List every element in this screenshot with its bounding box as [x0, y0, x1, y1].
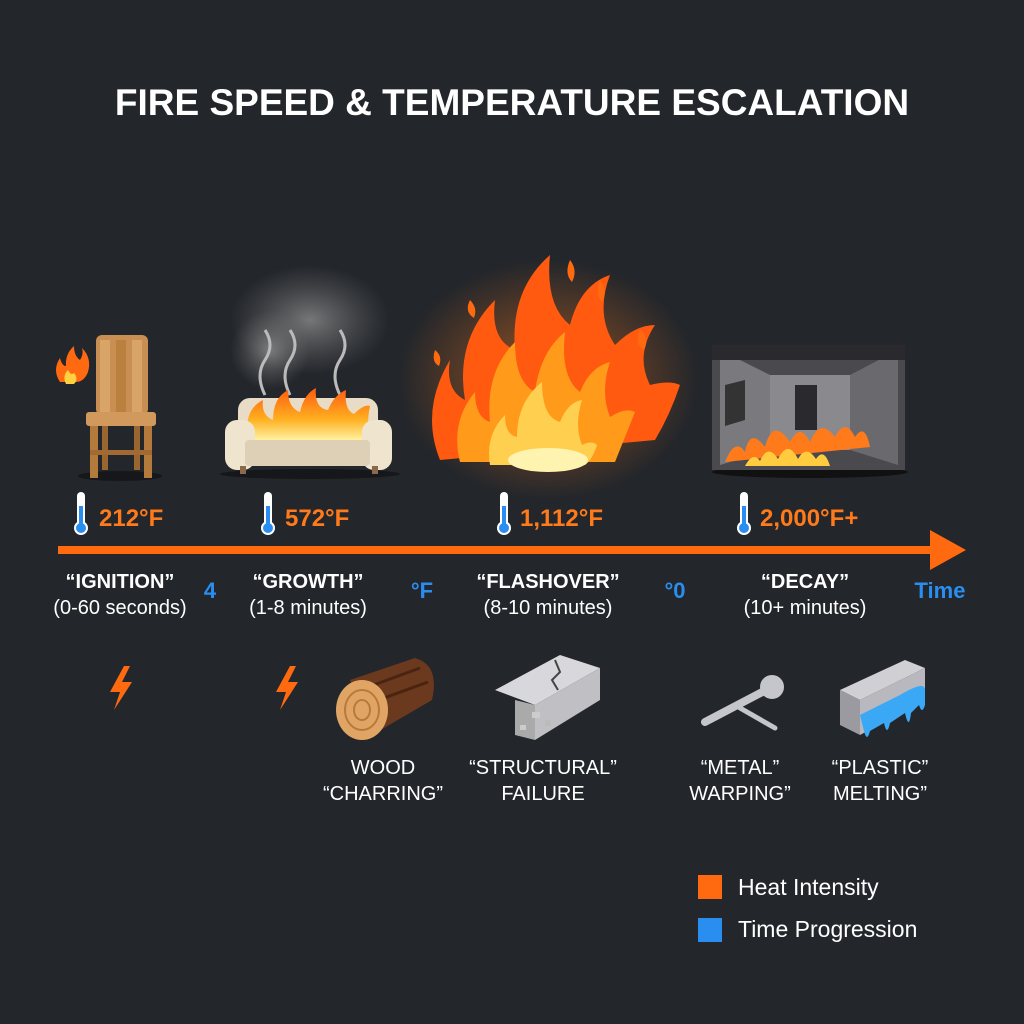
arrow: timeline: [58, 530, 966, 570]
stage: flashover: (8-10 minutes): [484, 597, 612, 619]
temperature: 572F: 572°F: [285, 505, 349, 532]
title: FIRE SPEED & TEMPERATURE ESCALATION: [115, 82, 909, 123]
label: plastic melting: “PLASTIC”: [832, 757, 928, 779]
legend: Time Progression: [738, 916, 917, 942]
label: wood charring: WOOD: [351, 757, 415, 779]
stage: flashover: “FLASHOVER”: [476, 571, 620, 593]
label: structural failure: “STRUCTURAL”: [469, 757, 617, 779]
label: wood charring: [323, 757, 443, 805]
label: plastic melting: MELTING”: [833, 783, 927, 805]
stage: ignition: “IGNITION”: [66, 571, 174, 593]
blue markers: °0: [664, 578, 686, 603]
icon: lightning 1: [110, 666, 132, 710]
icon: chair with small flame: [56, 335, 162, 481]
stage: decay: (10+ minutes): [744, 597, 866, 619]
temperature: 2000F+: 2,000°F+: [760, 505, 858, 532]
stage: growth: “GROWTH”: [252, 571, 364, 593]
stage: flashover: [476, 571, 620, 619]
icon: metal wrench: [705, 679, 780, 728]
stage: growth: [249, 571, 367, 619]
blue markers: 4: [204, 578, 217, 603]
temperature: 212F: [75, 492, 163, 534]
legend: [698, 874, 917, 942]
stage: decay: [744, 571, 866, 619]
label: metal warping: “METAL”: [701, 757, 779, 779]
label: plastic melting: [832, 757, 928, 805]
label: metal warping: WARPING”: [689, 783, 791, 805]
icon: burning sofa with smoke: [220, 265, 400, 479]
icon: flashover big flame: [398, 255, 698, 500]
temperature: 572F: [262, 492, 349, 534]
label: wood charring: “CHARRING”: [323, 783, 443, 805]
stage: ignition: [53, 571, 187, 619]
icon: burned room: [712, 345, 908, 478]
icon: lightning 2: [276, 666, 298, 710]
stage: ignition: (0-60 seconds): [53, 597, 187, 619]
stage: decay: “DECAY”: [761, 571, 849, 593]
blue markers: Time: [915, 578, 965, 603]
blue markers: [204, 578, 965, 603]
temperature: 212F: 212°F: [99, 505, 163, 532]
label: structural failure: FAILURE: [501, 783, 585, 805]
label: metal warping: [689, 757, 791, 805]
temperature: 2000F+: [738, 492, 858, 534]
icon: plastic melting beam: [840, 660, 925, 737]
blue markers: °F: [411, 578, 433, 603]
label: structural failure: [469, 757, 617, 805]
icon: structural beam: [495, 655, 600, 740]
stage: growth: (1-8 minutes): [249, 597, 367, 619]
legend: Heat Intensity: [738, 874, 879, 900]
temperature: 1112F: [498, 492, 603, 534]
icon: wood log: [336, 658, 434, 740]
temperature: 1112F: 1,112°F: [520, 505, 603, 532]
